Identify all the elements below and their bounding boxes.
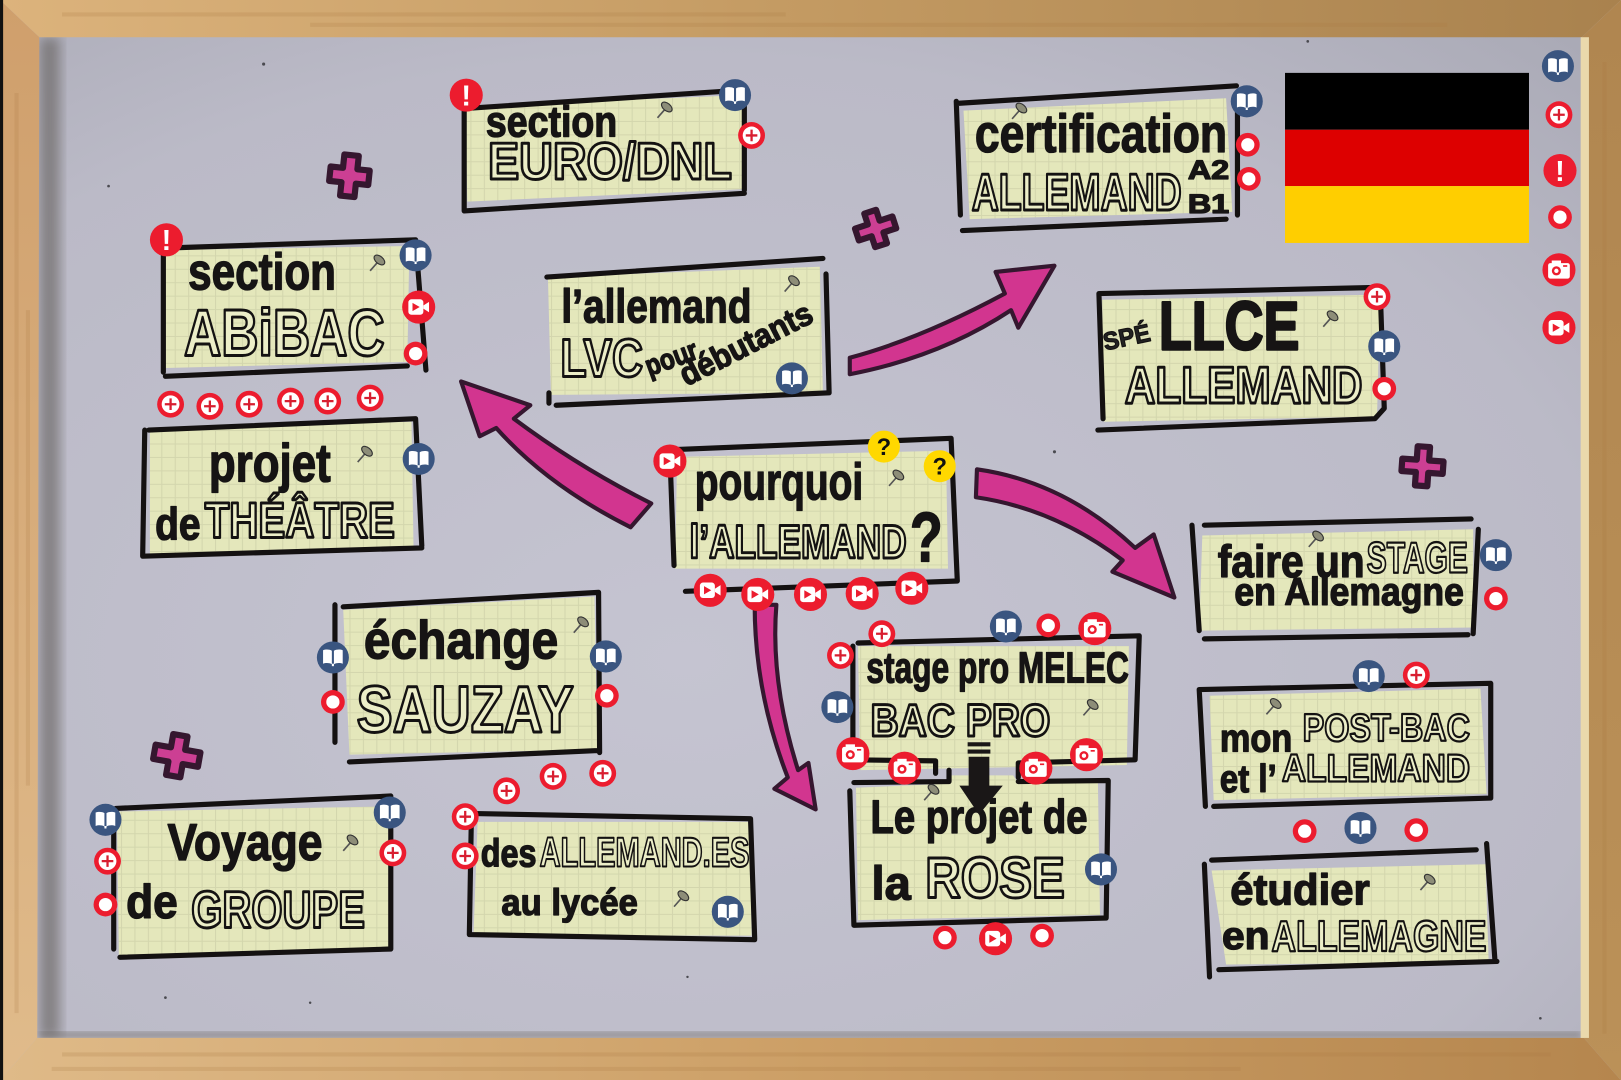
icon: dot [933, 926, 957, 950]
text: B1: B1 [1188, 189, 1229, 219]
note: échange Sauzay [335, 592, 600, 762]
icon: dot [94, 893, 117, 916]
text: question mark: ? [910, 497, 943, 576]
text: ALLEMAND: ALLEMAND [1282, 747, 1470, 791]
paper [856, 775, 1100, 920]
icon: plus [314, 388, 341, 415]
marker outline [1204, 844, 1497, 977]
text: EURO/DNL: EURO/DNL [488, 132, 732, 190]
paper [858, 646, 1129, 770]
icon: book [1542, 50, 1574, 82]
icon: dot [1237, 167, 1261, 191]
icon: book [821, 691, 853, 723]
paper [1210, 689, 1487, 800]
icon: dot [595, 684, 619, 708]
marker outline [547, 258, 829, 405]
text: ALLEMAND: ALLEMAND [972, 163, 1182, 221]
pin [674, 889, 690, 907]
text: A2: A2 [1188, 155, 1229, 185]
text: pour: pour [641, 334, 702, 383]
paper [548, 267, 823, 395]
note: spé LLCE allemand [1098, 287, 1384, 430]
text: POST-BAC: POST-BAC [1303, 706, 1470, 750]
text: de: de [155, 499, 201, 550]
pin [370, 253, 387, 271]
marker outline [469, 814, 755, 940]
text: des: des [481, 831, 537, 875]
icon: camera [1070, 738, 1103, 771]
marker outline [163, 240, 426, 376]
icon: book [776, 362, 808, 394]
icon: dot [1293, 819, 1317, 843]
pin [1420, 872, 1437, 890]
pin [574, 615, 590, 633]
decorative pink plus: right [1401, 445, 1444, 487]
note: section AbiBac [163, 240, 426, 376]
pin [924, 782, 941, 800]
pin [1309, 529, 1325, 547]
icon: book [712, 896, 744, 928]
icon: dot [1548, 205, 1572, 229]
icon: book [400, 239, 432, 271]
note: l'allemand LVC pour débutants [547, 258, 829, 405]
icon: book [1353, 660, 1385, 692]
icon: book [990, 610, 1022, 643]
note: mon post-bac et l'allemand [1199, 683, 1491, 806]
icon: question 2 [924, 450, 956, 482]
decorative pink plus: top centre [852, 206, 900, 251]
icon: plus [868, 620, 895, 647]
text: stage pro MELEC: stage pro MELEC [866, 644, 1129, 692]
text: au lycée: au lycée [501, 881, 638, 923]
icon: question 2: ? [932, 454, 947, 481]
icon: plus [493, 777, 520, 804]
paper [1212, 864, 1489, 965]
text: ALLEMAND.ES: ALLEMAND.ES [540, 829, 750, 875]
arrow: to ABIBAC [461, 381, 651, 527]
text: ROSE: ROSE [925, 846, 1065, 910]
icon: dot [404, 342, 427, 365]
icon: camera [888, 752, 921, 785]
text: ALLEMAGNE: ALLEMAGNE [1272, 913, 1487, 961]
icon: camera [1542, 253, 1576, 286]
icon: video [979, 922, 1012, 955]
decorative pink plus: top left [328, 153, 371, 198]
icon: video [895, 572, 928, 605]
text: LLCE: LLCE [1159, 288, 1299, 364]
marker outline [853, 636, 1139, 777]
marker outline [1098, 287, 1384, 430]
icon: book [1344, 812, 1376, 844]
icon: book [374, 797, 406, 829]
text: débutants: débutants [673, 295, 819, 394]
marker outline [114, 796, 391, 957]
note: projet de théâtre [143, 419, 422, 556]
icon: plus [452, 843, 479, 869]
note: le projet de la Rose [850, 770, 1108, 925]
icon: alert euro: ! [461, 80, 471, 112]
icon: alert euro [450, 79, 483, 112]
icon: alert side: ! [1555, 156, 1565, 188]
text: SAUZAY: SAUZAY [357, 673, 574, 747]
icon: dot [1236, 133, 1260, 157]
icon: plus [277, 388, 304, 415]
icon: video [794, 578, 827, 611]
icon: video [694, 574, 727, 607]
decorative pink plus: bottom left [151, 731, 203, 780]
icon: video [402, 290, 435, 324]
text: mon: mon [1220, 717, 1292, 761]
text: pourquoi: pourquoi [695, 452, 863, 510]
icon: plus [357, 385, 384, 411]
text: STAGE: STAGE [1367, 535, 1468, 583]
text: GROUPE: GROUPE [191, 880, 365, 938]
icon: alert abibac: ! [162, 225, 171, 257]
marker outline [335, 592, 600, 762]
icon: camera [1078, 612, 1111, 645]
icon: book [719, 79, 751, 111]
icon: dot [321, 690, 345, 714]
note: faire un stage en Allemagne [1192, 519, 1478, 639]
note: voyage de groupe [114, 796, 391, 957]
text: en: en [1222, 914, 1270, 958]
note: certification allemand A2 B1 [956, 86, 1237, 231]
paper [473, 822, 752, 936]
icon: book [317, 641, 349, 674]
arrow: to stage en Allemagne [976, 469, 1174, 598]
icon: dot [1030, 924, 1054, 947]
paper [1199, 529, 1473, 631]
text: la: la [871, 857, 911, 910]
paper [163, 246, 409, 368]
icon: video [653, 445, 686, 478]
paper [964, 98, 1232, 219]
icon: question 1: ? [877, 434, 891, 461]
note: section Euro/DNL [464, 90, 744, 211]
icon: plus [589, 760, 616, 787]
paper [117, 806, 391, 956]
pin [343, 833, 360, 851]
icon: book [590, 640, 622, 672]
text: en Allemagne: en Allemagne [1234, 570, 1464, 614]
text: BAC PRO: BAC PRO [870, 695, 1050, 746]
pin [1012, 101, 1029, 119]
icon: plus [738, 122, 765, 149]
icon: alert abibac [150, 223, 183, 257]
text: ALLEMAND: ALLEMAND [1125, 356, 1363, 414]
text: section: section [486, 98, 617, 146]
text: ABIBAC: ABiBAC [184, 297, 385, 371]
icon: dot [1036, 614, 1060, 637]
icon: plus [1403, 662, 1430, 689]
icon: plus [236, 391, 263, 418]
text: Le projet de: Le projet de [870, 791, 1088, 844]
icon: plus [1546, 101, 1572, 128]
icon: dot [1372, 377, 1396, 401]
marker outline [1192, 519, 1478, 639]
icon: alert side [1543, 154, 1577, 188]
icon: book [1480, 539, 1512, 571]
icon: video [741, 578, 774, 611]
icon: plus [452, 803, 479, 830]
icon: camera [836, 737, 869, 770]
paper [1102, 295, 1380, 422]
pin [785, 274, 801, 292]
paper [150, 422, 414, 554]
icon: plus [827, 642, 854, 669]
text: l'allemand: l’allemand [561, 281, 752, 334]
note: étudier en Allemagne [1204, 844, 1497, 977]
text: étudier: étudier [1230, 867, 1370, 915]
icon: book [89, 804, 121, 836]
marker outline [670, 438, 957, 591]
pin [358, 444, 374, 462]
icon: video [1542, 311, 1576, 344]
icon: book [1085, 853, 1117, 885]
text: et l': et l’ [1220, 757, 1277, 801]
black arrow: stage pro to projet [959, 742, 1003, 815]
text: faire un: faire un [1218, 536, 1365, 587]
icon: dot [1484, 587, 1508, 610]
pin [1323, 309, 1340, 327]
icon: book [403, 443, 435, 475]
pin [657, 100, 674, 118]
marker outline [143, 419, 422, 556]
pin [1266, 697, 1283, 714]
pin [1083, 698, 1100, 715]
paper [675, 451, 948, 569]
icon: video [846, 577, 879, 610]
pin [889, 468, 906, 486]
text: section: section [188, 242, 336, 300]
icon: plus [1364, 283, 1390, 310]
arrow: to le projet de la Rose [755, 605, 816, 809]
text: l'ALLEMAND: l’ALLEMAND [690, 516, 907, 569]
note: stage pro MELEC bac pro [853, 636, 1139, 777]
marker outline [850, 770, 1108, 925]
marker outline [956, 86, 1237, 231]
icon: plus [379, 839, 406, 866]
icon: dot [1404, 818, 1428, 842]
icon: plus [157, 391, 184, 418]
icon: book [1368, 330, 1400, 362]
text: de: de [126, 876, 178, 929]
icon: plus [540, 763, 567, 790]
marker outline [1199, 683, 1491, 806]
arrow: to certification [850, 266, 1054, 374]
paper [465, 95, 744, 202]
flag of Germany [1285, 73, 1529, 243]
note: des allemand.e.s au lycée [469, 814, 755, 940]
paper [343, 596, 598, 755]
icon: camera [1019, 752, 1052, 785]
icon: plus [94, 848, 121, 875]
text: THÉÂTRE: THÉÂTRE [205, 493, 395, 549]
text: LVC: LVC [560, 328, 643, 388]
icon: book [1231, 85, 1263, 117]
marker outline [464, 90, 744, 211]
text: certification: certification [975, 104, 1227, 164]
note: pourquoi l'allemand ? [670, 438, 957, 591]
text: projet: projet [209, 434, 331, 494]
icon: plus [196, 393, 223, 420]
text: échange: échange [364, 611, 558, 671]
icon: question 1 [868, 431, 900, 463]
text: SPÉ: SPÉ [1101, 319, 1153, 356]
text: Voyage: Voyage [167, 813, 323, 871]
